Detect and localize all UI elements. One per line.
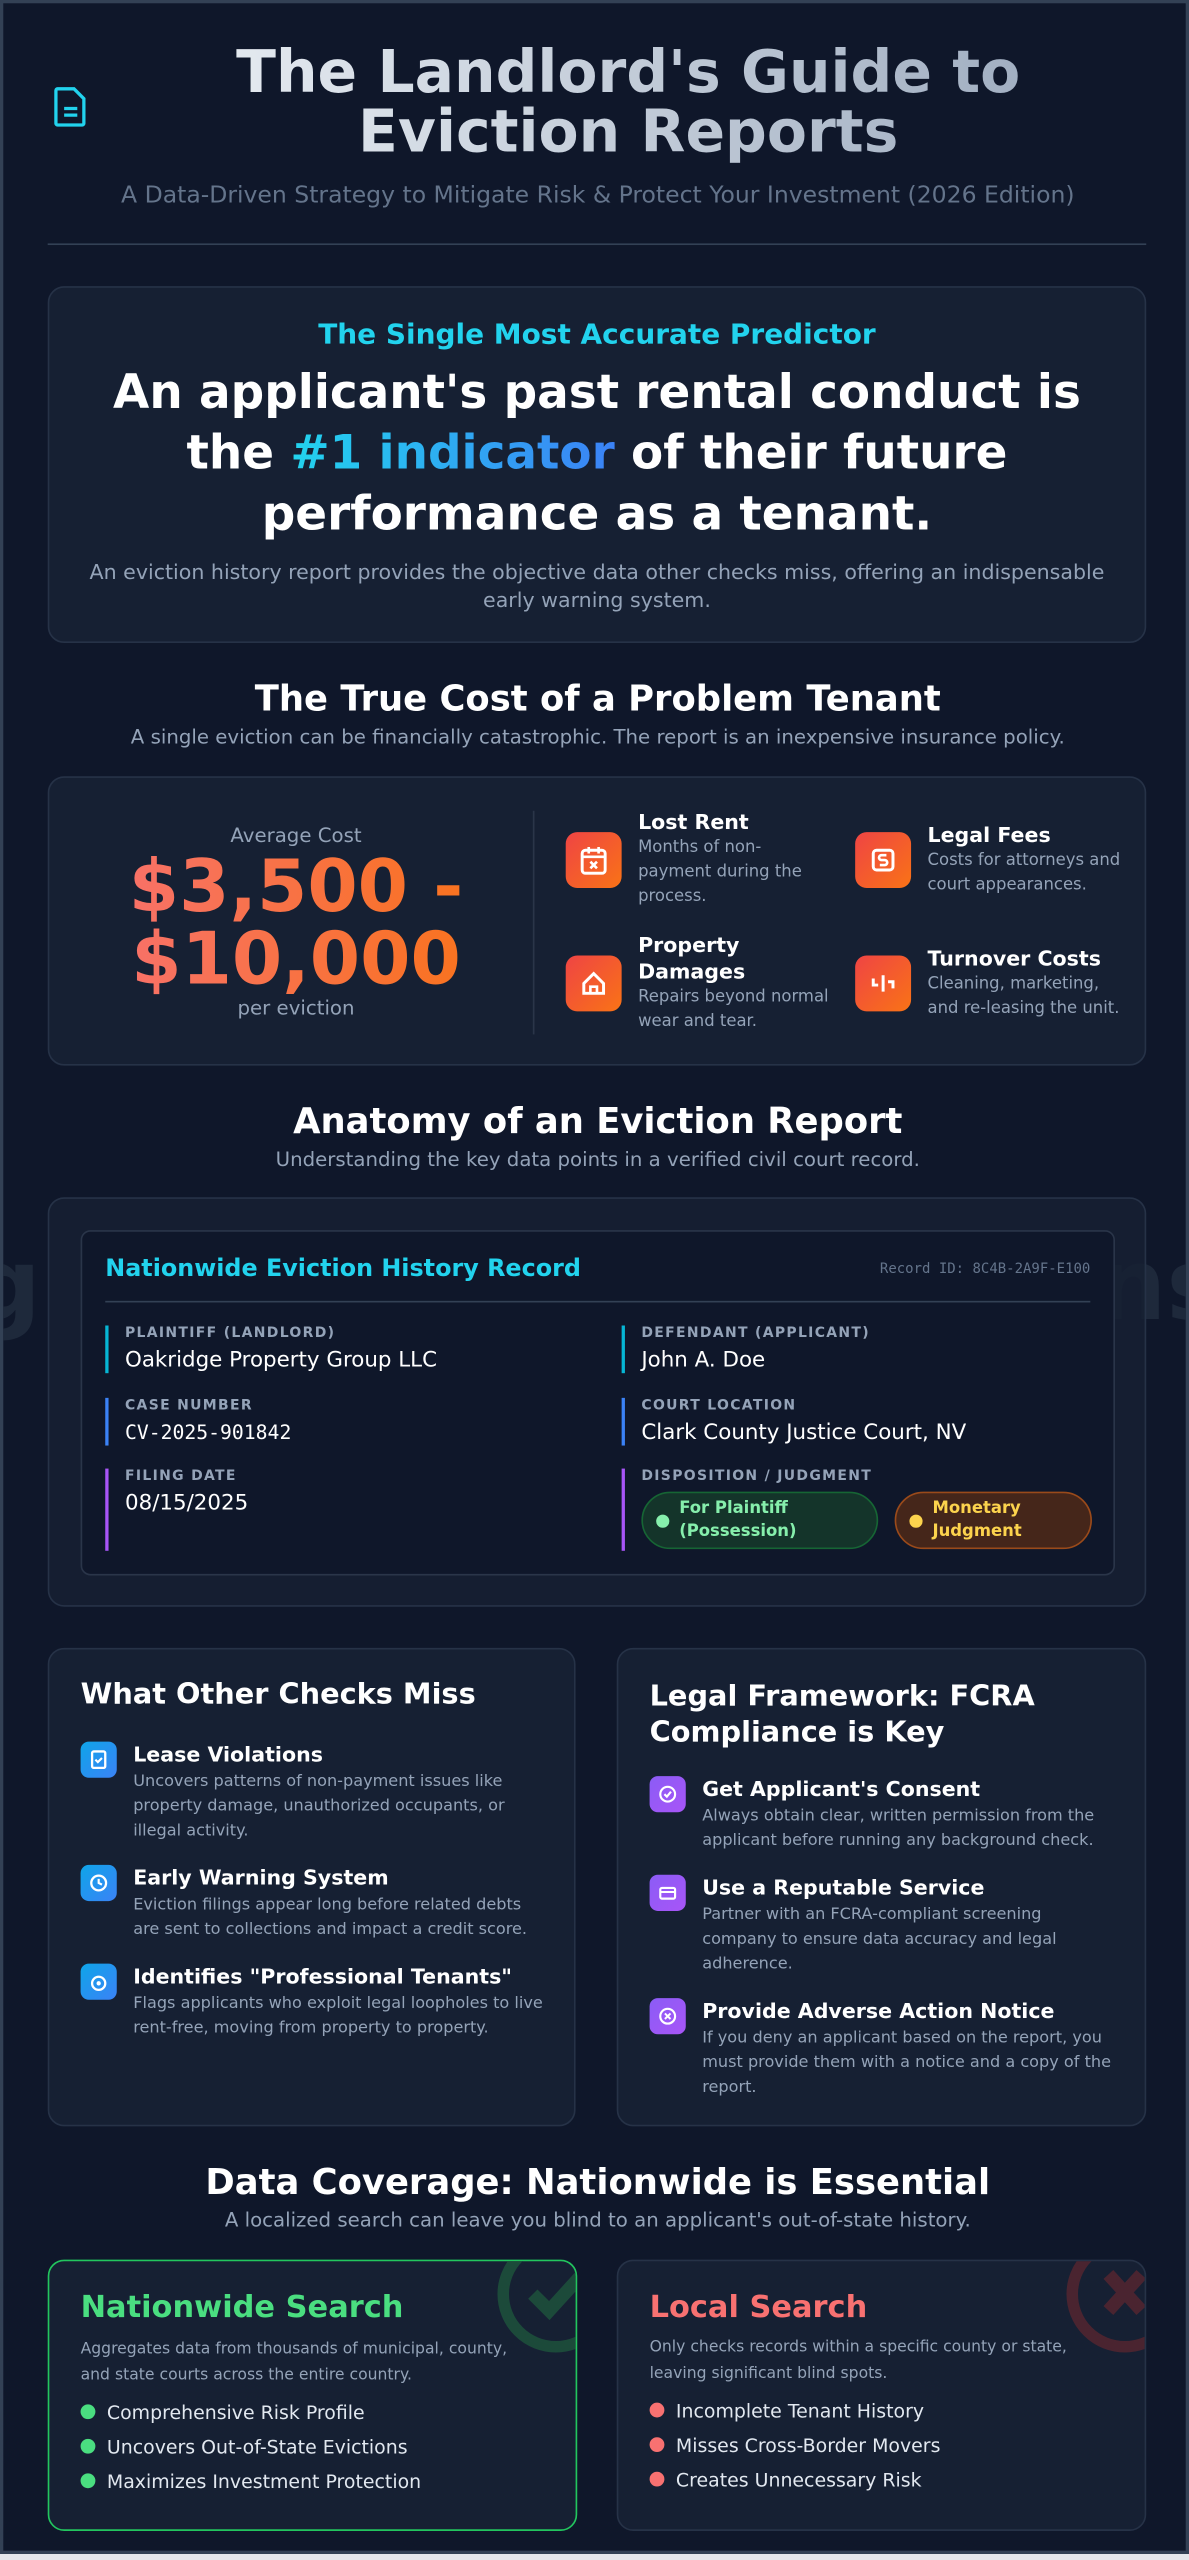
title: The Landlord's Guide to [236,39,1020,107]
big cost: per eviction [238,997,355,1020]
description: An eviction history report provides the objective data other checks miss, offering an indispensable early warning system. [90,559,1104,612]
item: consent [650,1776,1094,1850]
bullet list [80,2400,421,2492]
item: lease violations [80,1742,505,1840]
heading: anatomy: Anatomy of an Eviction Report [293,1102,902,1143]
heading: data coverage: Data Coverage: Nationwide is Essential [205,2163,990,2204]
bullet list: Maximizes Investment Protection [107,2469,421,2492]
item: consent: Get Applicant's Consent [702,1776,980,1801]
big cost: $10,000 [131,918,461,1002]
badge: for plaintiff: (Possession) [679,1522,797,1540]
item: legal fees [855,822,1120,895]
subtitle: A Data-Driven Strategy to Mitigate Risk & Protect Your Investment (2026 Edition) [121,183,1075,209]
bullet list [650,2399,940,2491]
panel heading: What Other Checks Miss [81,1679,476,1712]
subheading: A localized search can leave you blind to an applicant's out-of-state history. [225,2209,971,2232]
field: court location: COURT LOCATION [641,1398,796,1414]
item: property damages: Repairs beyond normal wear and tear. [638,988,829,1031]
panel: anatomy [48,1197,1146,1607]
field: case number: CV-2025-901842 [125,1421,291,1444]
field: plaintiff: Oakridge Property Group LLC [125,1349,437,1373]
panel heading [650,1681,1035,1750]
panel: nationwide search [48,2260,577,2531]
big cost [129,824,463,1020]
panel heading: Local Search [650,2291,867,2325]
subheading: Understanding the key data points in a verified civil court record. [276,1148,920,1171]
field: defendant: DEFENDANT (APPLICANT) [641,1325,870,1342]
panel heading: Legal Framework: FCRA [650,1681,1035,1714]
item: lease violations: Lease Violations [133,1742,323,1766]
item: legal fees: Legal Fees [928,822,1051,847]
item: professional tenants: Flags applicants who exploit legal loopholes to live rent-free, moving from property to property. [133,1995,543,2038]
field: court location [622,1398,966,1446]
item: property damages [566,932,829,1031]
bullet list: Misses Cross-Border Movers [676,2433,940,2456]
badge: monetary judgment: Monetary [932,1499,1021,1517]
subheading: A single eviction can be financially catastrophic. The report is an inexpensive insurance policy. [131,725,1065,748]
field: disposition: DISPOSITION / JUDGMENT [641,1469,872,1485]
field: plaintiff: PLAINTIFF (LANDLORD) [125,1325,335,1342]
headline: performance as a tenant. [262,487,932,541]
description: Aggregates data from thousands of municipal, county, and state courts across the entire country. [81,2340,507,2385]
big cost: Average Cost [230,824,362,847]
item: turnover costs: Cleaning, marketing, and re-leasing the unit. [928,975,1119,1018]
panel: legal framework [617,1648,1146,2126]
item: property damages: Damages [638,959,745,983]
item: lease violations: Uncovers patterns of non-payment issues like property damage, unauthorized occupants, or illegal activity. [133,1773,505,1840]
panel: key predictor [48,286,1146,643]
record title: Nationwide Eviction History Record [105,1256,581,1283]
bullet list: Uncovers Out-of-State Evictions [107,2435,408,2458]
headline [113,365,1081,541]
item: legal fees: Costs for attorneys and court appearances. [928,852,1120,895]
field: disposition [622,1469,1099,1551]
item: adverse action: Provide Adverse Action Notice [702,1998,1054,2023]
item: reputable service: Partner with an FCRA-compliant screening company to ensure data accuracy and legal adherence. [702,1906,1057,1973]
headline: An applicant's past rental conduct is [113,365,1081,419]
field: plaintiff [105,1325,437,1373]
description: Only checks records within a specific county or state, leaving significant blind spots. [650,2339,1067,2383]
bullet list: Comprehensive Risk Profile [107,2400,365,2423]
item: adverse action [650,1998,1111,2097]
item: early warning: Early Warning System [133,1865,389,1890]
icon: watermark x [1066,2261,1144,2352]
item: professional tenants: Identifies "Professional Tenants" [133,1964,512,1988]
watermark text [0,1228,1189,1344]
item: lost rent: Months of non-payment during the process. [638,839,802,906]
field: defendant: John A. Doe [641,1349,765,1373]
item: early warning [80,1864,527,1939]
item: property damages: Property [638,932,739,957]
title: Eviction Reports [358,99,898,166]
item: turnover costs: Turnover Costs [928,946,1101,970]
field: court location: Clark County Justice Court, NV [641,1421,966,1446]
item: reputable service [650,1874,1057,1973]
field: case number: CASE NUMBER [125,1398,253,1414]
item: turnover costs [855,946,1119,1018]
kicker: The Single Most Accurate Predictor [318,319,876,352]
field: case number [105,1398,291,1446]
heading: true cost: The True Cost of a Problem Tenant [255,679,941,720]
field: filing date [105,1469,248,1551]
badge: for plaintiff [641,1492,878,1549]
panel: local search [617,2260,1146,2531]
bullet list: Incomplete Tenant History [676,2399,924,2422]
item: professional tenants [80,1964,543,2038]
item: reputable service: Use a Reputable Service [702,1875,984,1899]
item: lost rent [566,809,802,906]
field: filing date: FILING DATE [125,1469,237,1485]
icon: document [54,87,86,127]
item: lost rent: Lost Rent [638,809,749,834]
panel: cost [48,776,1146,1066]
record id: Record ID: 8C4B-2A9F-E100 [880,1261,1090,1278]
panel heading: Compliance is Key [650,1717,944,1750]
headline: the #1 indicator of their future [186,426,1007,480]
badge: for plaintiff: For Plaintiff [679,1499,788,1517]
title [69,44,1187,163]
panel heading: Nationwide Search [81,2291,403,2325]
bullet list: Creates Unnecessary Risk [676,2468,922,2491]
item: early warning: Eviction filings appear long before related debts are sent to collections and impact a credit score. [133,1896,527,1939]
badge: monetary judgment [895,1492,1092,1549]
field: filing date: 08/15/2025 [125,1492,248,1516]
item: consent: Always obtain clear, written permission from the applicant before running any background check. [702,1807,1094,1850]
badge: monetary judgment: Judgment [932,1522,1022,1540]
item: adverse action: If you deny an applicant based on the report, you must provide them with a notice and a copy of the report. [702,2029,1111,2097]
icon: watermark check [498,2261,576,2352]
panel: what other checks miss [48,1648,576,2126]
field: defendant [622,1325,870,1373]
big cost: $3,500 - [129,845,463,929]
record card [81,1230,1115,1575]
